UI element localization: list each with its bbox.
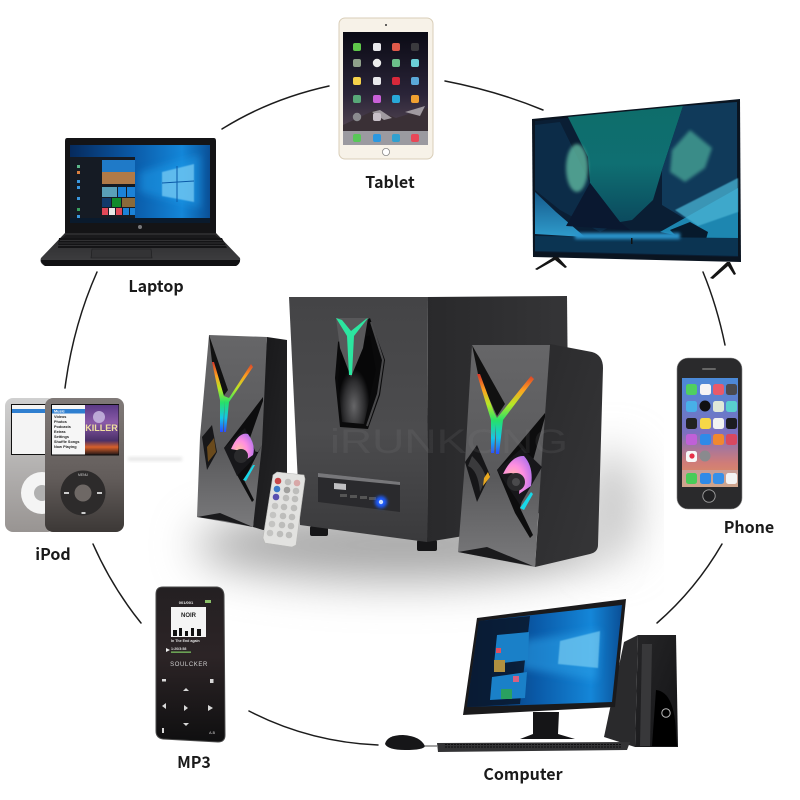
dark iPod: Now Playing	[54, 445, 77, 449]
subwoofer bass port	[335, 318, 385, 429]
device: laptop	[40, 138, 240, 266]
MP3 album art: NOIR	[181, 613, 197, 619]
device: television	[532, 99, 741, 279]
connecting circle arcs	[65, 81, 725, 745]
right satellite speaker	[458, 344, 603, 567]
monitor stand	[520, 712, 575, 739]
right speaker RGB Y light	[477, 374, 534, 454]
dark iPod	[45, 398, 124, 532]
dark iPod: Music	[54, 410, 65, 414]
device: MP3 player: 001/001	[179, 600, 194, 605]
device: MP3 player: In The End again	[171, 639, 200, 643]
remote control	[263, 472, 305, 547]
mouse	[385, 735, 437, 750]
label: Laptop: Laptop	[128, 273, 184, 297]
left speaker woofer	[202, 397, 263, 502]
brand watermark: iRUNKONG	[330, 423, 568, 461]
device: MP3 player	[156, 587, 225, 742]
device: tablet	[339, 18, 433, 159]
subwoofer	[289, 296, 569, 551]
dark iPod: Shuffle Songs	[54, 440, 80, 444]
subwoofer cabinet	[427, 296, 569, 542]
monitor	[463, 599, 626, 715]
device: MP3 player: SOULCKER	[170, 662, 208, 668]
phone screen with app icons	[682, 378, 738, 487]
dark iPod: Settings	[54, 435, 69, 439]
label: MP3: MP3	[177, 749, 211, 773]
device: desktop computer	[385, 599, 678, 752]
computer tower	[604, 635, 678, 747]
device: MP3 player: 1:20/3:58	[171, 647, 186, 651]
silver iPod	[5, 398, 63, 532]
left satellite speaker	[197, 335, 287, 530]
label: Phone: Phone	[724, 514, 774, 538]
television stand feet	[535, 257, 736, 279]
dark iPod: MENU	[78, 473, 89, 477]
label: iPod: iPod	[35, 541, 71, 565]
subwoofer control panel	[318, 473, 400, 512]
dark iPod: Photos	[54, 420, 67, 424]
dark iPod: Podcasts	[54, 425, 71, 429]
floor shadow under speakers	[128, 450, 638, 581]
television screen scene	[535, 102, 738, 257]
label: Computer: Computer	[483, 761, 563, 785]
device: MP3 player: A-B	[209, 731, 216, 735]
subwoofer feet	[310, 526, 328, 536]
laptop screen	[70, 145, 210, 223]
label: Tablet: Tablet	[365, 169, 415, 193]
tablet screen	[343, 32, 428, 145]
MP3 album art	[171, 607, 206, 637]
left speaker RGB Y light	[212, 362, 253, 432]
keyboard	[437, 742, 630, 752]
dark iPod: Videos	[54, 415, 66, 419]
dark iPod: Extras	[54, 430, 66, 434]
device: phone	[677, 358, 742, 509]
dark iPod: KILLER	[85, 423, 118, 433]
device: iPod pair	[5, 398, 124, 532]
right speaker woofer	[465, 413, 545, 538]
